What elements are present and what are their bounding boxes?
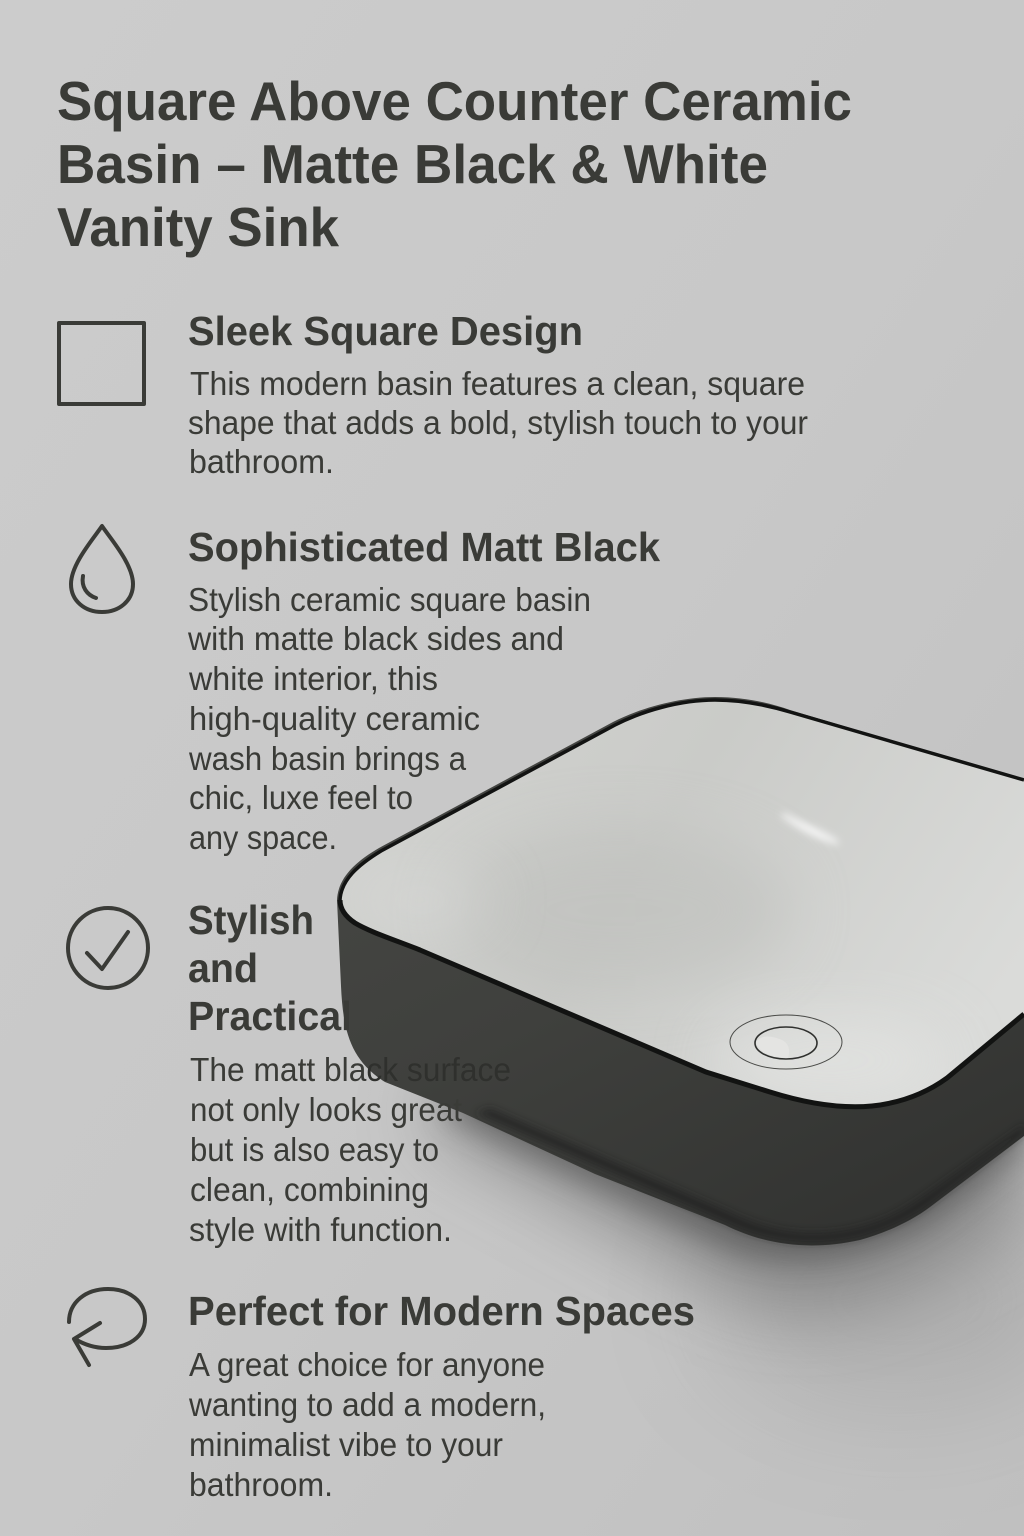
- basin shadow: [420, 1040, 1024, 1410]
- title: Basin – Matte Black & White: [57, 133, 768, 195]
- basin drain: [730, 1015, 842, 1069]
- heading: stylish and practical: Practical: [188, 993, 352, 1039]
- text: matt black description: with matte black sides and: [187, 620, 564, 657]
- feature 3: stylish and practical: [188, 897, 511, 1248]
- text: sleek square description: This modern basin features a clean, square: [190, 365, 805, 402]
- text: stylish and practical description: not only looks great: [190, 1091, 462, 1128]
- text: matt black description: chic, luxe feel to: [189, 779, 413, 816]
- text: sleek square description: [188, 365, 808, 480]
- text: matt black description: high-quality ceramic: [189, 700, 480, 737]
- icon: check circle: [68, 908, 148, 988]
- title: Square Above Counter Ceramic: [57, 70, 852, 132]
- icon: loop arrow: [69, 1289, 145, 1365]
- text: matt black description: white interior, this: [188, 660, 438, 697]
- heading: sleek square design: Sleek Square Design: [188, 308, 583, 354]
- icon: square: [59, 323, 144, 404]
- basin rim: [340, 700, 1024, 1107]
- feature 2: sophisticated matt black: [187, 524, 660, 856]
- text: stylish and practical description: style with function.: [189, 1211, 452, 1248]
- heading: perfect for modern spaces: Perfect for Modern Spaces: [188, 1288, 695, 1334]
- feature 1: sleek square design: [188, 308, 808, 480]
- heading: stylish and practical: [189, 904, 349, 1030]
- text: stylish and practical description: clean, combining: [190, 1171, 429, 1208]
- basin lower edge shading: [476, 1108, 1024, 1242]
- text: matt black description: [187, 581, 591, 856]
- text: stylish and practical description: The matt black surface: [190, 1051, 511, 1088]
- text: modern spaces description: A great choice for anyone: [189, 1346, 545, 1383]
- text: matt black description: wash basin brings a: [188, 740, 467, 777]
- icon: water drop: [71, 526, 133, 612]
- text: modern spaces description: minimalist vibe to your: [189, 1426, 503, 1463]
- text: sleek square description: bathroom.: [189, 443, 334, 480]
- heading: sophisticated matt black: Sophisticated Matt Black: [188, 524, 660, 570]
- text: stylish and practical description: but is also easy to: [190, 1131, 439, 1168]
- heading: stylish and practical: and: [188, 945, 258, 991]
- text: sleek square description: shape that adds a bold, stylish touch to your: [188, 404, 808, 441]
- heading: stylish and practical: Stylish: [188, 897, 314, 943]
- text: matt black description: any space.: [189, 819, 337, 856]
- product image: basin: [330, 690, 1024, 1410]
- title: Vanity Sink: [57, 196, 339, 258]
- text: matt black description: Stylish ceramic square basin: [188, 581, 591, 618]
- text: modern spaces description: [188, 1346, 546, 1503]
- text: modern spaces description: wanting to add a modern,: [188, 1386, 546, 1423]
- text: modern spaces description: bathroom.: [189, 1466, 333, 1503]
- basin body: [337, 697, 1024, 1245]
- text: stylish and practical description: [189, 1051, 511, 1248]
- title: [57, 70, 852, 258]
- basin interior: [330, 690, 1024, 1120]
- basin highlight: [782, 814, 838, 843]
- feature 4: perfect for modern spaces: [188, 1288, 695, 1503]
